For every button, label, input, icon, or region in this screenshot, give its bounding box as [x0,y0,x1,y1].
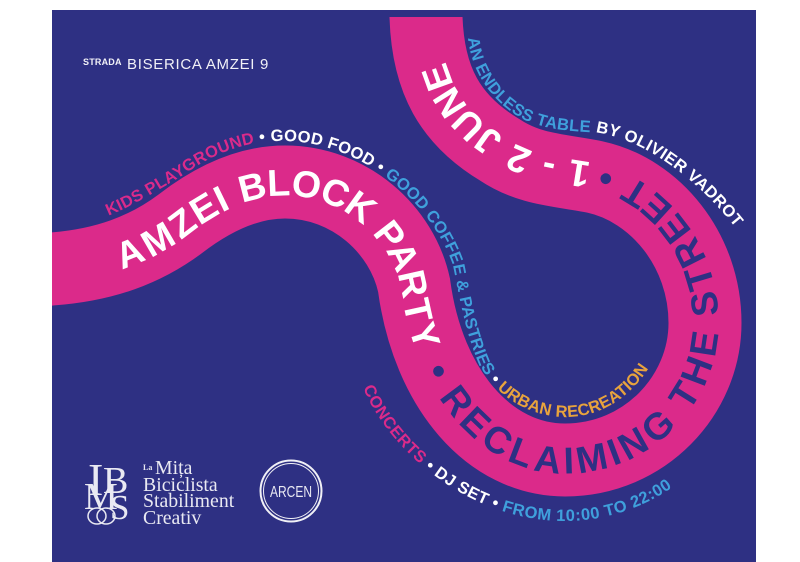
schedule along lower edge: CONCERTS • DJ SET • FROM 10:00 TO 22:00 [364,385,670,521]
logo: La Mita Biciclista wordmark: Stabiliment [143,490,235,512]
logo: La Mita Biciclista wordmark: Creativ [143,507,201,529]
pink winding road [20,0,705,460]
logo: La Mita Biciclista monogram: S [110,488,129,527]
logo: La Mita Biciclista monogram: M [84,476,118,518]
address: STRADA [83,57,122,67]
logo: Arcen [260,460,322,522]
logo: Arcen: ARCEN [270,484,312,501]
logo: La Mita Biciclista monogram [84,454,129,527]
road title: Reclaiming the Street: • RECLAIMING THE STREET • [433,173,718,474]
activities list along upper edge: KIDS PLAYGROUND • GOOD FOOD • GOOD COFFEE & PASTRIES • URBAN RECREATION [105,130,648,418]
road title: dates: 1 - 2 JUNE [422,62,589,186]
logo: La Mita Biciclista wordmark: Mița [155,457,193,479]
road title: Amzei Block Party: AMZEI BLOCK PARTY [122,170,440,343]
logo: La Mita Biciclista wordmark: La [143,463,152,472]
endless table caption: AN ENDLESS TABLE BY OLIVIER VADROT [468,38,744,224]
address: BISERICA AMZEI 9 [127,56,269,73]
logo: La Mita Biciclista monogram: I [88,454,103,505]
logo: La Mita Biciclista monogram: B [103,460,128,502]
logo: La Mita Biciclista wordmark [143,457,235,529]
logo: La Mita Biciclista wordmark: Biciclista [143,474,218,496]
